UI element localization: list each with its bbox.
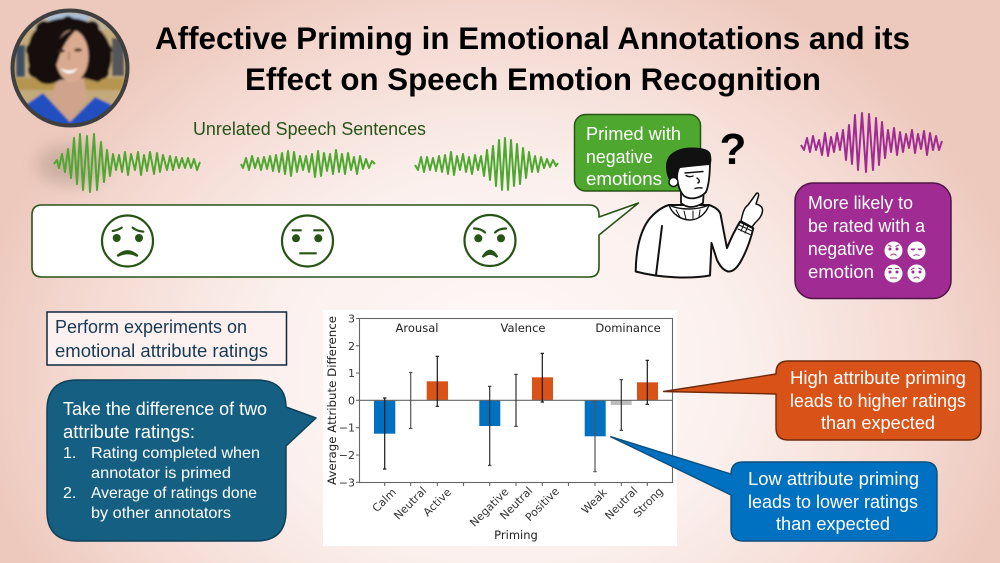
waveform 3 [415, 138, 558, 190]
x axis tick labels: Calm [370, 486, 399, 515]
callout: take the difference: Rating completed when [91, 445, 260, 462]
y axis tick labels: −3 [339, 476, 355, 490]
head [677, 160, 710, 198]
icon: small worried face [908, 264, 926, 282]
callout: high attribute priming: leads to higher ratings [790, 391, 966, 411]
x axis tick labels: Active [421, 486, 454, 519]
x axis tick labels: Positive [523, 485, 562, 524]
callout: primed with negative emotions [574, 114, 700, 191]
icon: angry face [464, 215, 516, 266]
callout: take the difference: 2. [63, 485, 76, 502]
icon: neutral face [282, 216, 333, 266]
heading: unrelated speech sentences: Unrelated Speech Sentences [193, 119, 426, 139]
bars [374, 377, 658, 436]
group titles: Arousal [396, 321, 438, 335]
y axis tick labels: 1 [348, 367, 355, 380]
x axis tick labels [370, 484, 666, 529]
waveform 2 [241, 150, 375, 177]
x axis tick labels: Neutral [391, 484, 429, 522]
callout: more likely negative rating: emotion [808, 262, 874, 282]
facial features [685, 172, 703, 188]
callout: more likely negative rating [795, 183, 951, 298]
callout: high attribute priming: High attribute priming [790, 368, 966, 388]
pointing hand [741, 193, 763, 227]
y axis tick labels [339, 312, 355, 490]
ear [669, 178, 678, 186]
y axis tick labels: 3 [348, 312, 355, 326]
callout: take the difference: Average of ratings done [91, 485, 257, 502]
callout: more likely negative rating: More likely to [808, 193, 913, 213]
icon: small angry face [884, 242, 902, 260]
title: Affective Priming in Emotional Annotations and its [155, 20, 910, 56]
neck and collar [681, 182, 704, 207]
speech bubble: negative emotion faces [32, 203, 638, 277]
callout: primed with negative emotions: emotions [586, 169, 662, 189]
waveform: purple target sentence [801, 113, 942, 172]
callout: low attribute priming [611, 437, 937, 541]
text box: perform experiments: Perform experiments on [55, 317, 247, 337]
callout: take the difference: by other annotators [91, 505, 231, 522]
icon: question mark: ? [720, 125, 746, 174]
title [155, 20, 910, 97]
y axis title: Average Attribute Difference [325, 316, 339, 485]
y axis tick labels: −2 [339, 449, 355, 462]
hair [666, 147, 711, 183]
group titles [396, 321, 661, 335]
x axis tick labels: Strong [631, 485, 666, 520]
callout: primed with negative emotions: Primed with [586, 124, 681, 144]
callout: take the difference: attribute ratings: [63, 422, 195, 442]
waveform shadow [38, 145, 106, 185]
icon: portrait photo [10, 8, 130, 128]
callout: high attribute priming [664, 361, 981, 440]
group titles: Valence [501, 321, 545, 335]
error bars [383, 353, 649, 472]
waveform 1 [54, 134, 200, 192]
text box: perform experiments: emotional attribute ratings [55, 341, 268, 361]
callout: low attribute priming: than expected [776, 514, 890, 534]
callout: low attribute priming: leads to lower ratings [748, 492, 918, 512]
callout: more likely negative rating: be rated with a [808, 216, 926, 236]
icon: thinking person [636, 147, 763, 277]
title: Effect on Speech Emotion Recognition [245, 61, 821, 97]
icon: small eye-roll face [908, 242, 926, 260]
icon: worried face [102, 216, 153, 266]
group titles: Dominance [595, 321, 661, 335]
icon: small neutral face [884, 264, 902, 282]
axes [356, 318, 672, 486]
callout: low attribute priming: Low attribute priming [748, 469, 919, 489]
callout: take the difference: annotator is primed [91, 465, 231, 482]
x axis tick labels: Neutral [497, 484, 535, 522]
callout: high attribute priming: than expected [821, 413, 935, 433]
callout: more likely negative rating: negative [808, 239, 874, 259]
y axis tick labels: −1 [339, 422, 355, 434]
callout: take the difference: 1. [63, 445, 76, 462]
x axis tick labels: Weak [579, 486, 610, 517]
x axis tick labels: Neutral [602, 484, 640, 522]
x axis title: Priming [494, 528, 538, 542]
sweater [636, 205, 753, 277]
y axis tick labels: 0 [348, 394, 355, 408]
sleeve cuff [738, 222, 754, 234]
callout: take the difference [47, 380, 316, 541]
callout: take the difference: Take the difference of two [63, 399, 267, 419]
bar chart: average attribute difference by priming [323, 310, 677, 546]
y axis tick labels: 2 [348, 340, 355, 353]
callout: primed with negative emotions: negative [586, 147, 653, 167]
x axis tick labels: Negative [467, 485, 512, 529]
text box: perform experiments [47, 312, 286, 365]
